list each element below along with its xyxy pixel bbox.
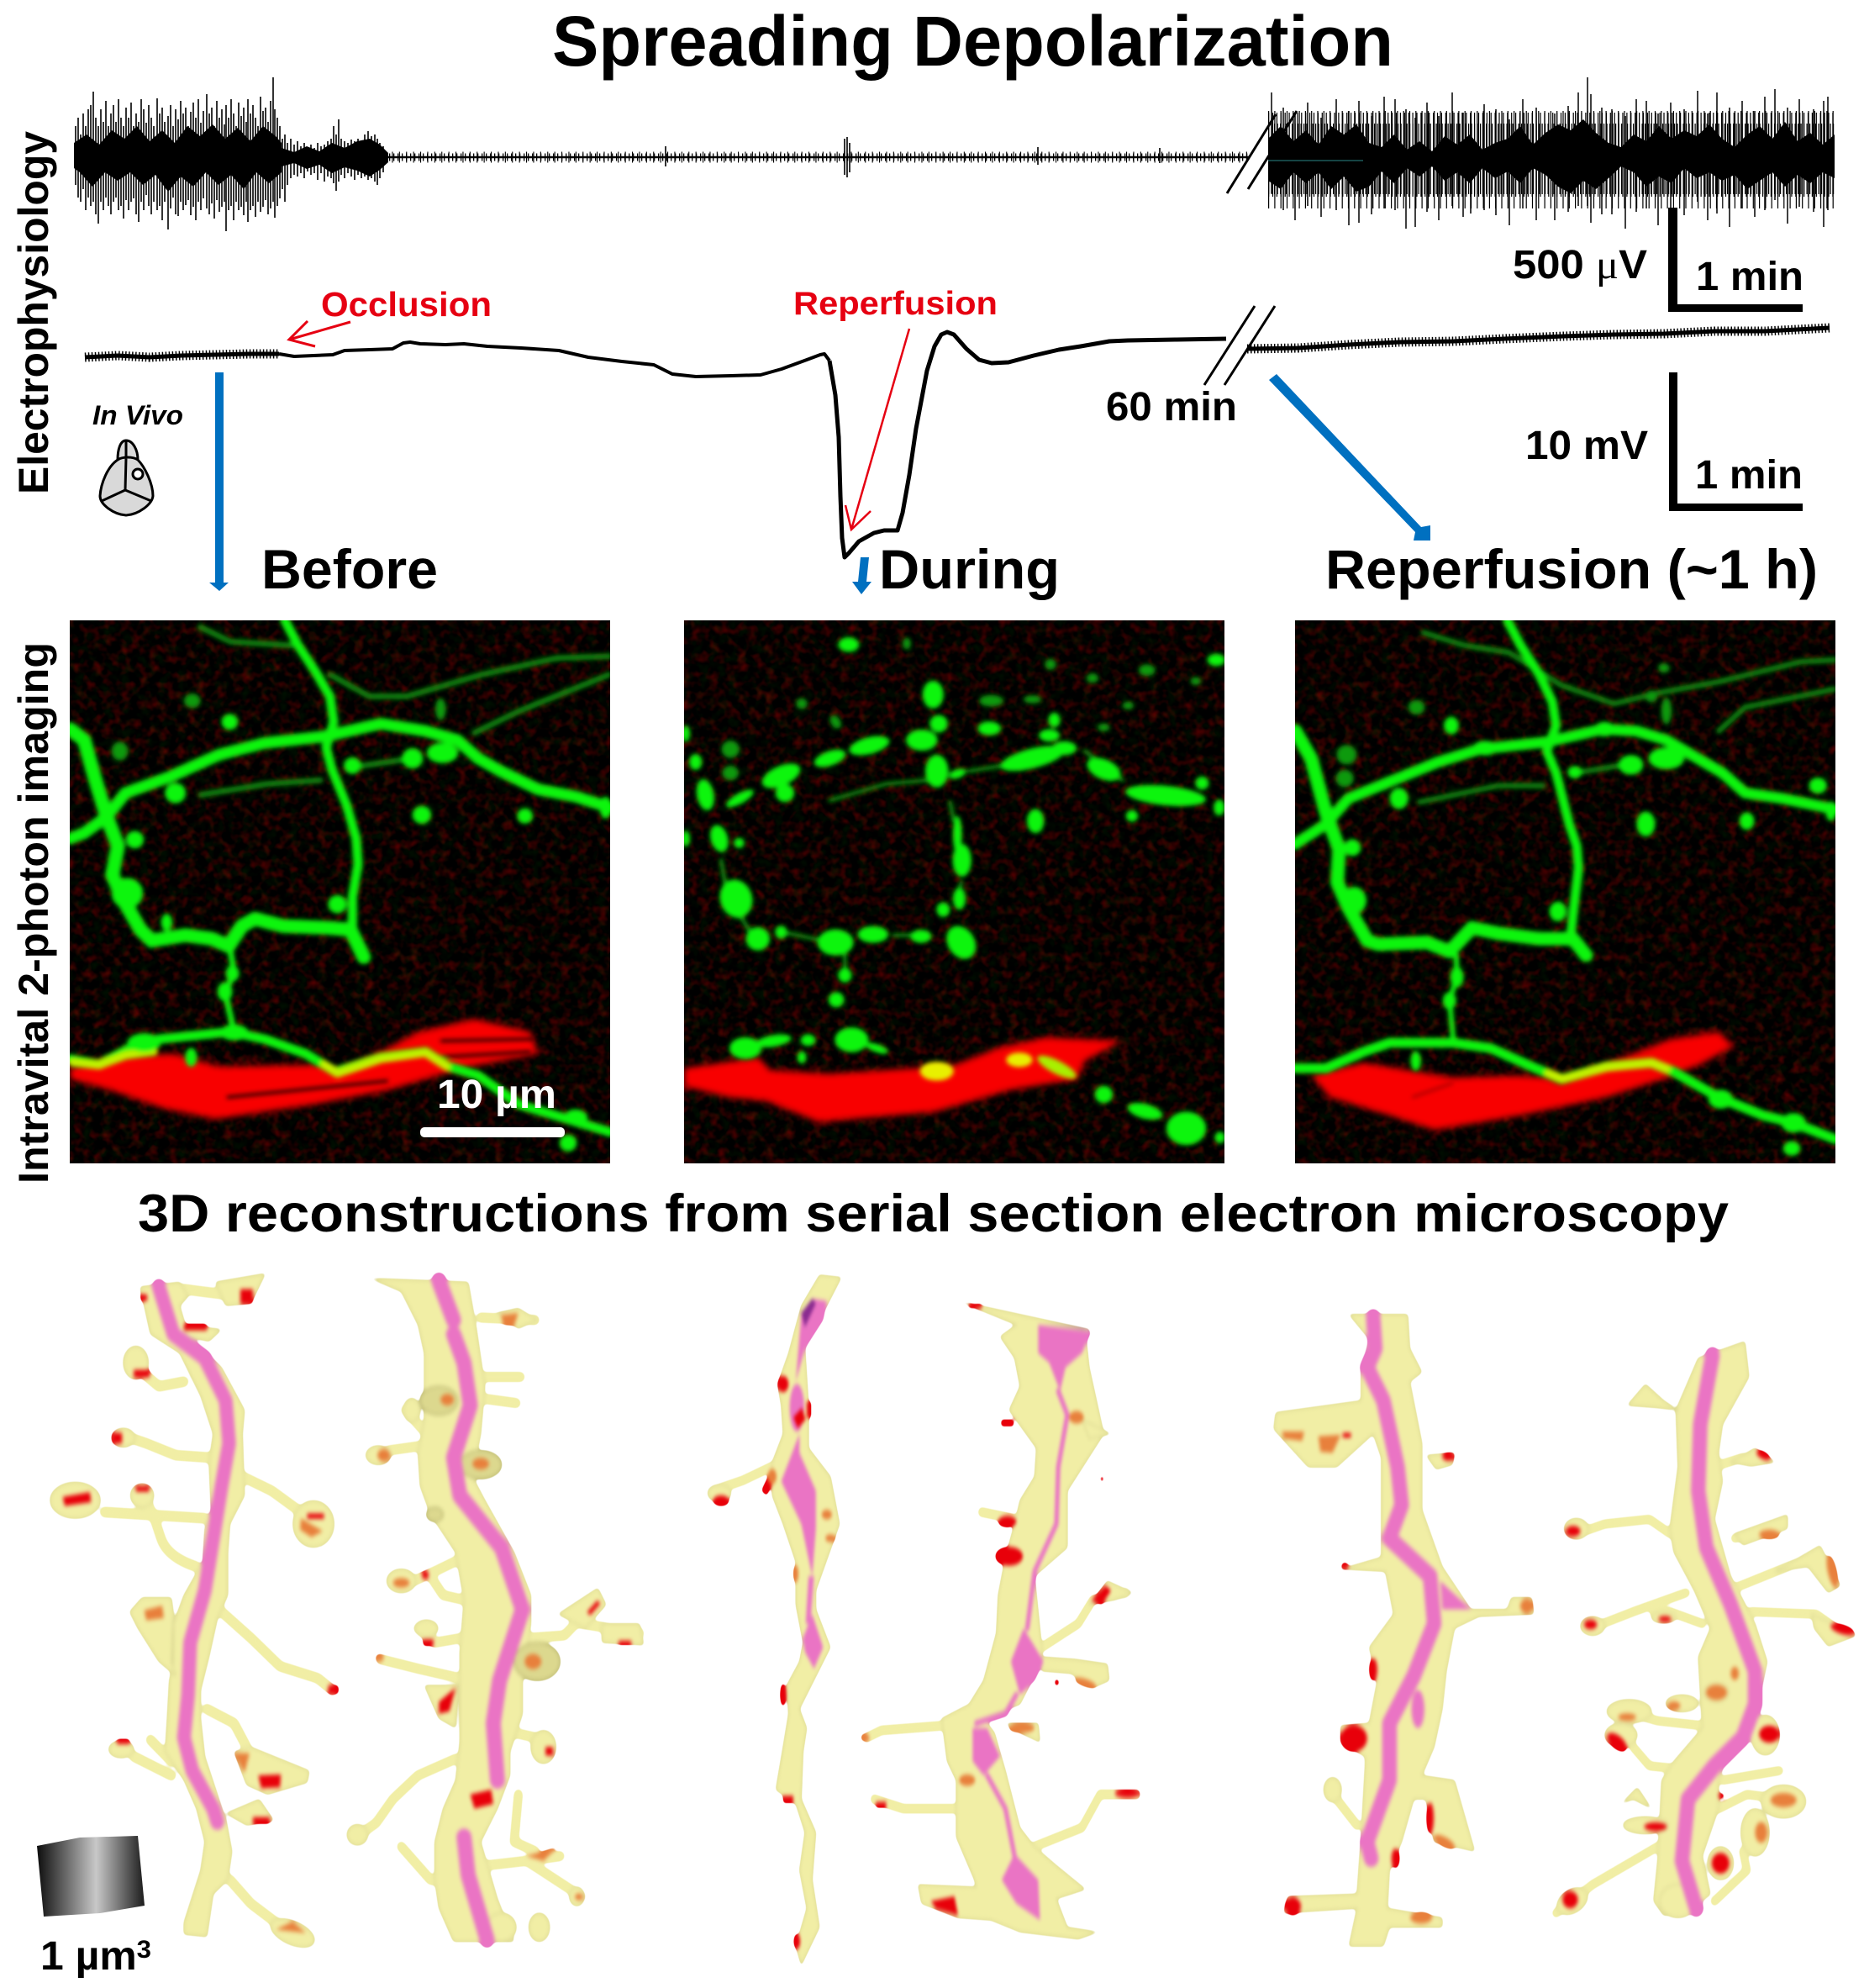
heading: before: Before — [261, 538, 438, 600]
label: 1 cubic micrometre: 3 — [137, 1936, 151, 1964]
reconstruction: before, dendrite 2 — [347, 1279, 644, 1942]
label: 1 cubic micrometre: 1 µm — [40, 1934, 133, 1979]
reconstruction: before, dendrite 1 — [50, 1273, 339, 1953]
panel: 2-photon before — [70, 620, 612, 1163]
scale label: 10 mV: 10 mV — [1525, 424, 1648, 468]
title: Spreading Depolarization — [552, 2, 1393, 81]
panel: 2-photon reperfusion — [1295, 620, 1836, 1163]
icon: mouse brain — [100, 440, 153, 515]
axis label: electrophysiology: Electrophysiology — [10, 131, 57, 494]
label: occlusion: Occlusion — [321, 285, 492, 324]
scale bar: 10 micrometres — [420, 1127, 565, 1137]
break label: 60 min: 60 min — [1106, 385, 1237, 430]
icon: 1 cubic micrometre cube — [37, 1836, 145, 1917]
heading: reperfusion: Reperfusion (~1 h) — [1325, 538, 1818, 600]
arrow: reperfusion — [845, 329, 909, 530]
reconstruction: reperfusion, dendrite 6 — [1553, 1342, 1856, 1920]
label: reperfusion: Reperfusion — [793, 286, 998, 322]
trace: DC potential (bottom) — [85, 328, 1830, 557]
axis breaks: bottom trace — [1204, 306, 1275, 385]
arrow: reperfusion timepoint — [1269, 374, 1430, 541]
scale label: 1 min top: 1 min — [1696, 255, 1803, 299]
scale label: 1 min bottom: 1 min — [1695, 453, 1803, 498]
reconstruction: during, dendrite 3 — [708, 1275, 841, 1965]
panel: 2-photon during — [682, 620, 1225, 1163]
scale bar: 500 microvolts / 1 min — [1668, 208, 1803, 312]
heading: during: During — [879, 538, 1060, 600]
arrow: before — [209, 372, 229, 591]
scale label: 10 micrometres: 10 µm — [437, 1073, 556, 1117]
trace: extracellular activity (top) — [74, 77, 1835, 231]
reconstruction: during, dendrite 4 — [861, 1301, 1140, 1939]
scale label: 500 microvolts: 500 μV — [1513, 243, 1647, 287]
reconstruction: reperfusion, dendrite 5 — [1274, 1315, 1534, 1946]
axis label: 2-photon imaging: Intravital 2-photon imaging — [10, 642, 57, 1184]
arrow: during — [852, 557, 871, 594]
arrow: occlusion — [289, 321, 350, 346]
heading: 3D reconstructions: 3D reconstructions from serial section electron microscopy — [138, 1184, 1729, 1243]
scale bar: 10 mV / 1 min — [1669, 372, 1803, 511]
axis breaks: top trace — [1227, 111, 1297, 193]
label: in vivo: In Vivo — [92, 400, 183, 430]
